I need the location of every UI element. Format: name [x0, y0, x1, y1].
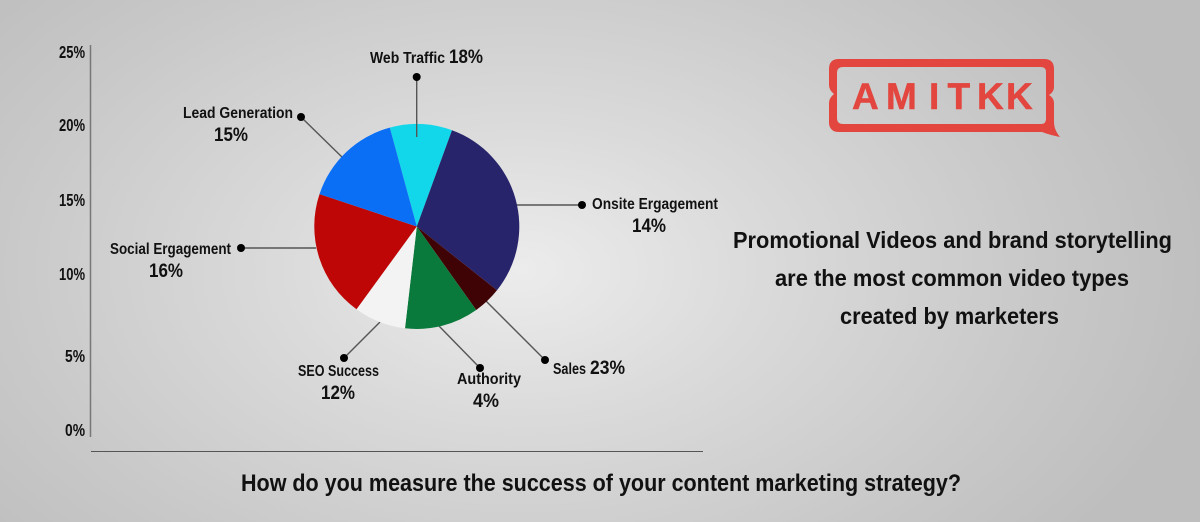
y axis with percentage scale: 25% — [59, 42, 85, 62]
leader lines with end dots — [237, 73, 586, 372]
logo: AMITKK speech bubble — [829, 59, 1060, 137]
label: lead generation — [183, 105, 293, 146]
label: seo success: SEO Success — [298, 363, 379, 380]
logo: AMITKK speech bubble: AMITKK — [852, 76, 1033, 117]
label: authority — [457, 371, 521, 412]
label: social engagement: Social Ergagement — [110, 241, 231, 258]
pie chart — [314, 124, 519, 329]
label: social engagement: 16% — [149, 261, 183, 282]
chart question caption: How do you measure the success of your content marketing strategy? — [241, 470, 961, 497]
label: web traffic: Web Traffic — [370, 50, 445, 67]
label: onsite engagement: 14% — [632, 216, 666, 237]
x axis line — [91, 450, 703, 452]
label: sales: Sales — [553, 361, 586, 378]
y axis with percentage scale: 20% — [59, 115, 85, 135]
leader line overlay on cyan slice — [416, 124, 418, 137]
label: onsite engagement — [592, 196, 718, 237]
label: onsite engagement: Onsite Ergagement — [592, 196, 718, 213]
label: authority: 4% — [473, 391, 499, 412]
label: seo success: 12% — [321, 383, 355, 404]
label: web traffic: 18% — [449, 47, 483, 68]
label: seo success — [298, 363, 379, 404]
label: sales: 23% — [590, 358, 625, 379]
y axis with percentage scale — [59, 42, 90, 440]
text block: promotional videos: Promotional Videos and brand storytelling — [733, 227, 1172, 253]
text block: promotional videos — [733, 227, 1172, 329]
label: authority: Authority — [457, 371, 521, 388]
label: sales — [553, 358, 625, 379]
text block: promotional videos: are the most common video types — [775, 265, 1129, 291]
label: lead generation: Lead Generation — [183, 105, 293, 122]
y axis with percentage scale: 10% — [59, 264, 85, 284]
y axis with percentage scale: 5% — [65, 346, 85, 366]
label: social engagement — [110, 241, 231, 282]
label: web traffic — [370, 47, 483, 68]
y axis with percentage scale: 15% — [59, 190, 85, 210]
text block: promotional videos: created by marketers — [840, 303, 1059, 329]
label: lead generation: 15% — [214, 125, 248, 146]
y axis with percentage scale: 0% — [65, 420, 85, 440]
